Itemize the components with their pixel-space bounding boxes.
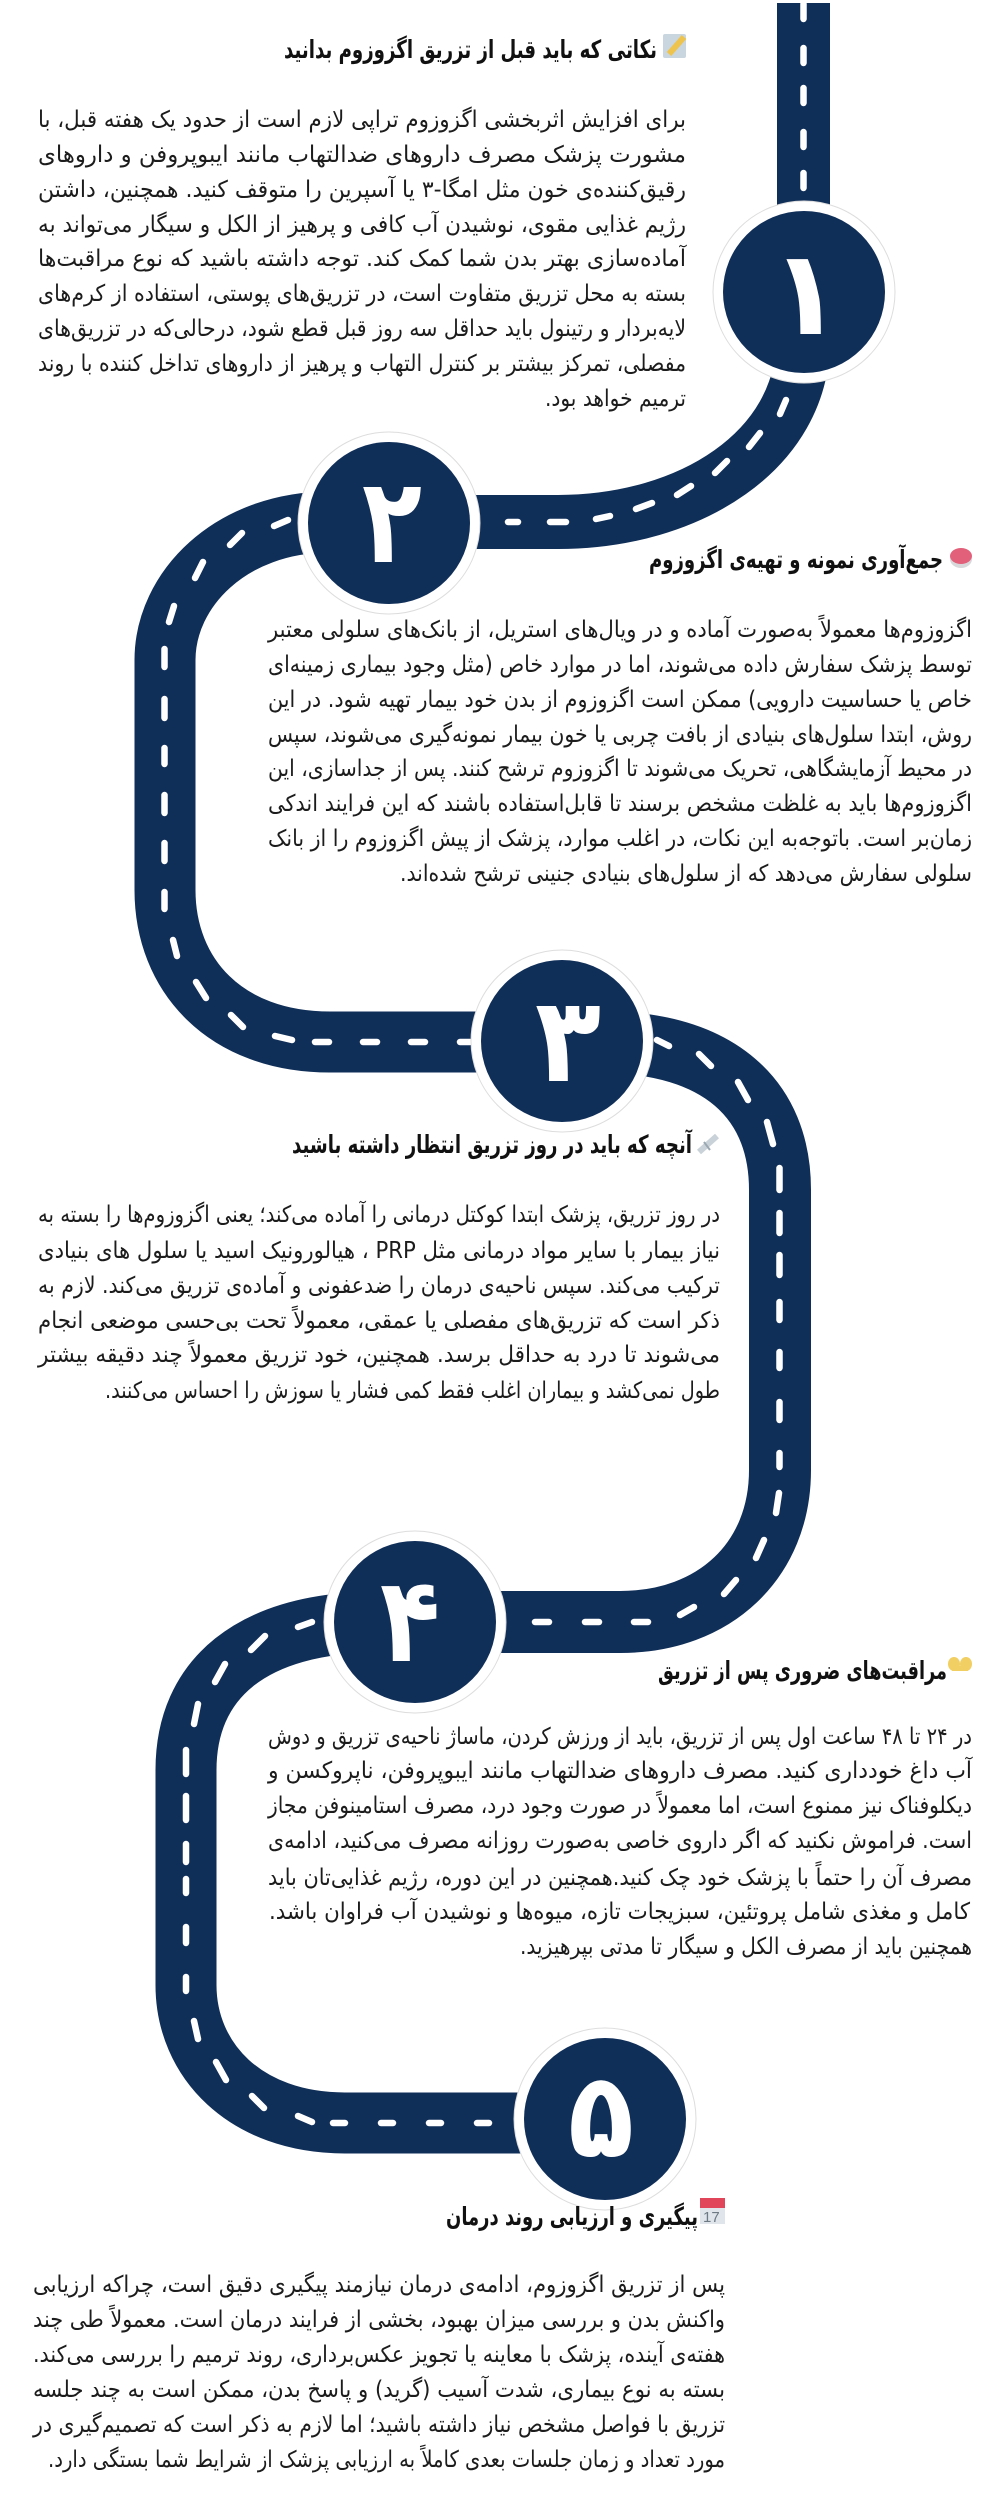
text block 4: آب داغ خودداری کنید. مصرف داروهای ضدالتهاب مانند ایبوپروفن، ناپروکسن و xyxy=(267,1756,974,1784)
marker circle 5: ۵ xyxy=(568,2046,634,2184)
text block 1 xyxy=(38,106,688,412)
text block 1: مفصلی، تمرکز بیشتر بر کنترل التهاب و پرهیز از داروهای تداخل کننده با روند xyxy=(38,351,686,377)
text block 1: مشورت پزشک مصرف داروهای ضدالتهاب مانند ایبوپروفن و داروهای xyxy=(38,142,686,168)
text block 5: مورد تعداد و زمان جلسات بعدی کاملاً به ارزیابی پزشک از شرایط شما بستگی دارد. xyxy=(48,2445,725,2473)
text block 5: پس از تزریق اگزوزوم، ادامه‌ی درمان نیازمند پیگیری دقیق است، چراکه ارزیابی xyxy=(33,2271,725,2298)
icon: petri dish xyxy=(950,548,972,568)
text block 1: برای افزایش اثربخشی اگزوزوم تراپی لازم است از حدود یک هفته قبل، با xyxy=(38,106,686,133)
heading 1: نکاتی که باید قبل از تزریق اگزوزوم بدانید xyxy=(284,35,657,65)
text block 1: آماده‌سازی بهتر بدن شما کمک کند. توجه داشته باشید که نوع مراقبت‌ها xyxy=(38,244,688,272)
icon: calendar: 17 xyxy=(703,2209,720,2226)
road centre dashes xyxy=(164,4,804,2123)
text block 3 xyxy=(37,1200,720,1404)
marker circle 3: ۳ xyxy=(535,971,601,1109)
text block 3: می‌شوند تا درد به حداقل برسد. همچنین، خود تزریق معمولاً چند دقیقه بیشتر xyxy=(37,1340,720,1368)
text block 3: طول نمی‌کشد و بیماران اغلب فقط کمی فشار یا سوزش را احساس می‌کنند. xyxy=(105,1378,720,1404)
text block 5: تزریق با فواصل مشخص نیاز داشته باشید؛ اما لازم به ذکر است که تصمیم‌گیری در xyxy=(32,2411,725,2438)
text block 3: ذکر است که تزریق‌های مفصلی یا عمقی، معمولاً تحت بی‌حسی موضعی انجام xyxy=(38,1306,720,1334)
icon: memo xyxy=(663,34,686,58)
text block 3: نیاز بیمار با سایر مواد درمانی مثل PRP ، هیالورونیک اسید یا سلول های بنیادی xyxy=(38,1238,720,1264)
marker circle 4 xyxy=(324,1531,506,1713)
heading 5: پیگیری و ارزیابی روند درمان xyxy=(446,2202,698,2232)
text block 3: در روز تزریق، پزشک ابتدا کوکتل درمانی را آماده می‌کند؛ یعنی اگزوزوم‌ها را بسته به xyxy=(38,1200,720,1228)
winding road xyxy=(164,3,804,2123)
text block 4: در ۲۴ تا ۴۸ ساعت اول پس از تزریق، باید از ورزش کردن، ماساژ ناحیه‌ی تزریق و دوش xyxy=(268,1724,972,1750)
marker circle 5 xyxy=(514,2028,696,2210)
icon: syringe xyxy=(699,1136,717,1152)
text block 1: رژیم غذایی مقوی، نوشیدن آب کافی و پرهیز از الکل و سیگار می‌تواند به xyxy=(38,210,686,238)
text block 5: هفته‌ی آینده، پزشک با معاینه یا تجویز عکس‌برداری، روند ترمیم را بررسی می‌کند. xyxy=(33,2340,725,2368)
marker circle 2 xyxy=(298,432,480,614)
text block 1: رقیق‌کننده‌ی خون مثل امگا-۳ یا آسپرین را متوقف کنید. همچنین، داشتن xyxy=(38,175,686,203)
text block 5 xyxy=(32,2271,725,2473)
icon: calendar xyxy=(700,2198,725,2226)
icon: raised hands xyxy=(948,1657,972,1671)
marker circle 1 xyxy=(713,201,895,383)
text block 3: ترکیب می‌کند. سپس ناحیه‌ی درمان را ضدعفونی و آماده‌ی تزریق می‌کند. لازم به xyxy=(38,1271,720,1299)
text block 5: واکنش بدن و بررسی میزان بهبود، بخشی از فرایند درمان است. معمولاً طی چند xyxy=(33,2305,725,2333)
text block 1: ترمیم خواهد بود. xyxy=(545,386,686,412)
marker circle 4: ۴ xyxy=(380,1551,440,1689)
heading 3: آنچه که باید در روز تزریق انتظار داشته باشید xyxy=(292,1129,693,1160)
marker circle 3 xyxy=(471,950,653,1132)
text block 5: بسته به نوع بیماری، شدت آسیب (گرید) و پاسخ بدن، ممکن است به چند جلسه xyxy=(33,2375,725,2403)
marker circle 2: ۲ xyxy=(362,452,422,590)
text block 1: بسته به محل تزریق متفاوت است، در تزریق‌های پوستی، استفاده از کرم‌های xyxy=(38,281,686,307)
marker circle 1: ۱ xyxy=(770,224,842,362)
text block 2 xyxy=(267,615,972,887)
text block 1: لایه‌بردار و رتینول باید حداقل سه روز قبل قطع شود، درحالی‌که در تزریق‌های xyxy=(38,316,686,342)
text block 4 xyxy=(267,1724,974,1960)
